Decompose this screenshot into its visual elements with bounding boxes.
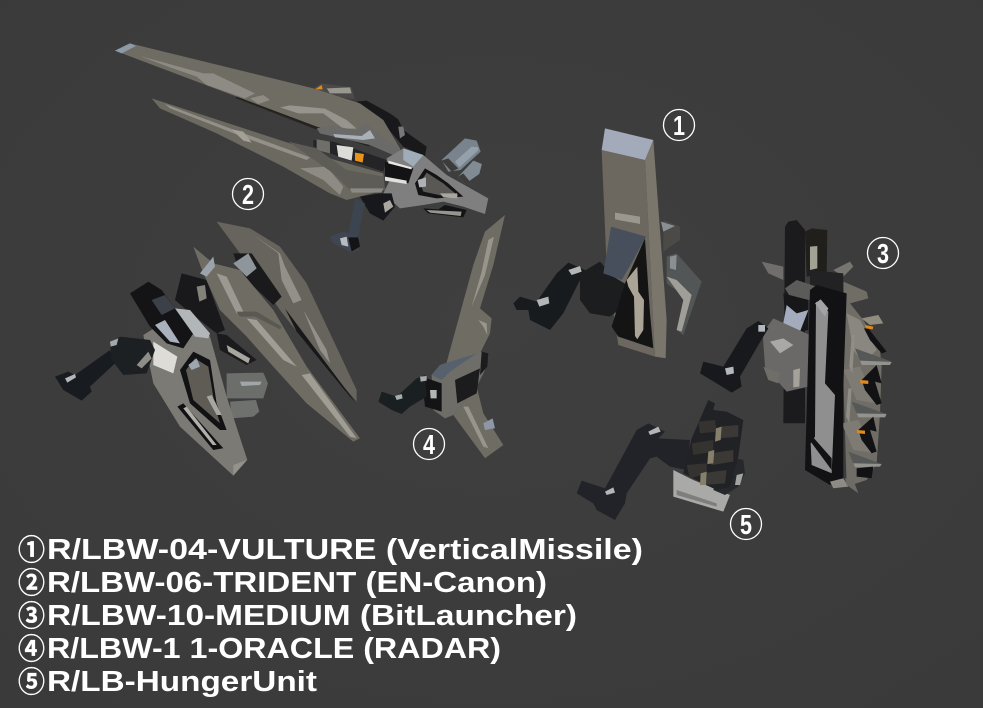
- weapon 3: medium bit launcher: [700, 220, 892, 493]
- callout 3: [868, 238, 898, 269]
- callout 1: 1: [673, 110, 685, 141]
- legend: R/LBW-1 1-ORACLE (RADAR): [47, 633, 501, 665]
- callout 4: 4: [423, 429, 435, 460]
- callout 4: [414, 428, 444, 460]
- legend: ⑤: [18, 666, 45, 699]
- legend: ④: [18, 633, 45, 666]
- callout 2: 2: [242, 179, 254, 210]
- front blade: [193, 247, 360, 442]
- legend: ②: [18, 567, 45, 600]
- launcher panel: [645, 140, 667, 358]
- front panel: [805, 285, 847, 485]
- callout 3: 3: [877, 238, 889, 269]
- weapon 2: trident rear view: [55, 222, 360, 476]
- grip: [360, 193, 395, 221]
- callout 5: 5: [740, 509, 752, 540]
- upper blade: [115, 43, 402, 158]
- rear body: [383, 148, 488, 214]
- arm: [55, 350, 115, 401]
- arm: [700, 321, 768, 393]
- weapon 2: trident side view: [115, 43, 488, 253]
- weapon 1: vulture missile launcher: [513, 128, 702, 358]
- legend: R/LBW-10-MEDIUM (BitLauncher): [47, 600, 577, 632]
- lower blade: [152, 98, 385, 200]
- main body: [143, 310, 247, 476]
- legend: [18, 534, 643, 699]
- centre housing: [810, 270, 843, 293]
- legend: R/LBW-06-TRIDENT (EN-Canon): [47, 567, 547, 599]
- callout 5: [730, 508, 762, 540]
- legend: ③: [18, 600, 45, 633]
- legend: ①: [18, 534, 45, 567]
- callout 2: [232, 178, 264, 210]
- weapon 4: oracle radar: [378, 215, 505, 458]
- callout 1: [664, 110, 694, 141]
- weapon 5: hunger unit: [577, 400, 745, 520]
- legend: R/LBW-04-VULTURE (VerticalMissile): [47, 534, 643, 566]
- legend: R/LB-HungerUnit: [47, 666, 317, 698]
- rear blade: [217, 222, 357, 402]
- spiked side: [843, 282, 882, 487]
